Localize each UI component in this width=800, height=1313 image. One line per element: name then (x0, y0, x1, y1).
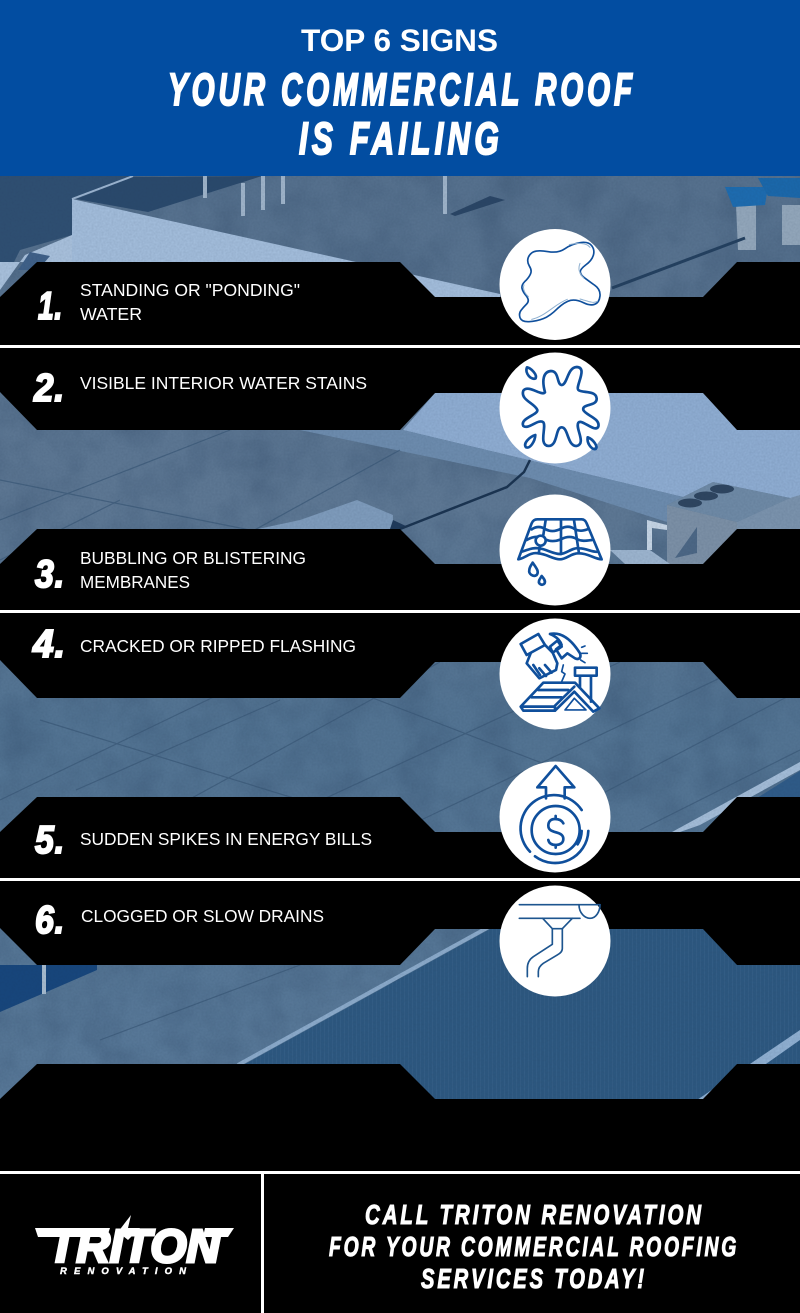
label 2: VISIBLE INTERIOR WATER STAINS (80, 373, 367, 393)
logo: Triton Renovation: TRITON (48, 1220, 221, 1272)
band: sign 1 (0, 262, 800, 345)
icon: puddle (500, 229, 610, 340)
icon: water splat (500, 352, 610, 464)
number 5: 5. (35, 819, 65, 862)
label 4: CRACKED OR RIPPED FLASHING (80, 636, 356, 656)
item 2 (33, 367, 367, 410)
band: footer background (0, 1064, 800, 1313)
number 2: 2. (33, 367, 65, 410)
number 1: 1. (38, 285, 63, 328)
item 1 (38, 280, 300, 328)
number 3: 3. (35, 553, 65, 596)
icon: blistering roof membrane (500, 494, 610, 606)
icon: rising dollar coin (500, 762, 610, 872)
logo: Triton Renovation: RENOVATION (60, 1266, 190, 1277)
item 5 (35, 819, 372, 862)
icon: gutter downspout (500, 886, 610, 996)
header band (0, 0, 800, 176)
label 6: CLOGGED OR SLOW DRAINS (81, 906, 324, 926)
band: sign 2 (0, 348, 800, 430)
heading: is failing: IS FAILING (299, 113, 503, 164)
label 1: WATER (80, 304, 142, 324)
icon: hammer on roof flashing (500, 618, 610, 730)
cta line 3: SERVICES TODAY! (421, 1263, 647, 1294)
label 3: BUBBLING OR BLISTERING (80, 548, 306, 568)
call to action (329, 1199, 739, 1294)
band: sign 4 (0, 613, 800, 698)
number 4: 4. (32, 623, 66, 666)
heading: top 6 signs: TOP 6 SIGNS (301, 22, 498, 58)
label 5: SUDDEN SPIKES IN ENERGY BILLS (80, 829, 372, 849)
band: sign 3 (0, 529, 800, 610)
band: sign 5 (0, 797, 800, 878)
item 3 (35, 548, 306, 596)
label 3: MEMBRANES (80, 572, 190, 592)
band: sign 6 (0, 881, 800, 965)
background: rooftop photo (0, 176, 800, 1171)
label 1: STANDING OR "PONDING" (80, 280, 300, 300)
item 4 (32, 623, 356, 666)
number 6: 6. (35, 899, 65, 942)
item 6 (35, 899, 324, 942)
